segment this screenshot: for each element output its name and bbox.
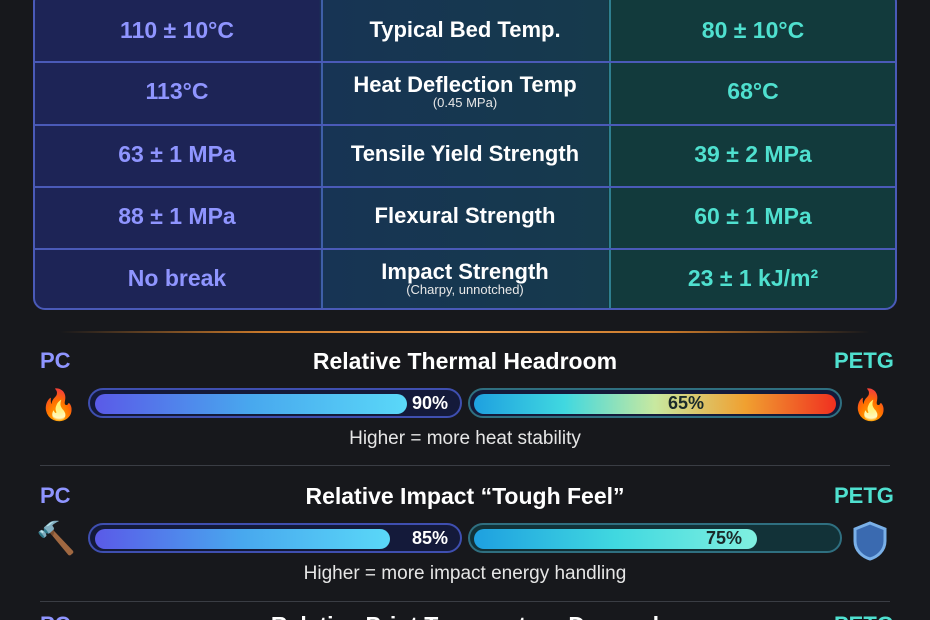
bar: PC 90% xyxy=(88,388,462,418)
icon: flame left: 🔥 xyxy=(40,389,77,422)
icon: shield xyxy=(854,521,886,560)
row: flexural: Flexural Strength xyxy=(375,203,555,228)
row: impact: Impact Strength xyxy=(381,259,549,284)
section: impact tough feel: PC xyxy=(40,483,71,508)
section: thermal headroom: PC xyxy=(40,348,71,373)
section: print temperature (cut off) xyxy=(40,612,894,620)
section: impact tough feel: PETG xyxy=(834,483,894,508)
section: thermal headroom: Relative Thermal Headroom xyxy=(313,348,617,374)
row: impact: No break xyxy=(128,265,226,291)
row: bed temp: 80 ± 10°C xyxy=(702,16,804,42)
icon: flame right: 🔥 xyxy=(852,389,889,422)
bar: PETG 65% xyxy=(468,388,842,418)
row: bed temp xyxy=(120,16,804,42)
row: heat deflection: 113°C xyxy=(146,78,208,104)
row: heat deflection: 68°C xyxy=(727,78,779,104)
row: tensile: Tensile Yield Strength xyxy=(351,141,579,166)
row: heat deflection: Heat Deflection Temp xyxy=(353,72,577,97)
section: thermal headroom: Higher = more heat stability xyxy=(349,428,581,449)
row: impact xyxy=(128,259,818,297)
section: impact tough feel: Relative Impact “Tough Feel” xyxy=(305,483,625,509)
section: impact tough feel: Higher = more impact energy handling xyxy=(304,563,626,584)
row: impact: (Charpy, unnotched) xyxy=(406,282,524,297)
row: flexural: 60 ± 1 MPa xyxy=(694,202,812,228)
section: thermal headroom: PETG xyxy=(834,348,894,373)
bar: PETG 75% xyxy=(468,523,842,553)
bar: PC 85% xyxy=(88,523,462,553)
row: tensile: 63 ± 1 MPa xyxy=(118,140,236,166)
row: heat deflection: (0.45 MPa) xyxy=(433,95,497,110)
row: flexural: 88 ± 1 MPa xyxy=(118,202,236,228)
icon: hammer: 🔨 xyxy=(36,520,76,556)
section: impact tough feel xyxy=(36,483,894,584)
row: flexural xyxy=(118,202,812,228)
row: bed temp: 110 ± 10°C xyxy=(120,16,234,42)
row: tensile xyxy=(118,140,812,166)
bar: PC 90%: 90% xyxy=(412,393,448,413)
bar: PETG 65%: 65% xyxy=(668,393,704,413)
row: tensile: 39 ± 2 MPa xyxy=(694,140,812,166)
row: impact: 23 ± 1 kJ/m² xyxy=(688,265,818,291)
bar: PC 85%: 85% xyxy=(412,528,448,548)
panel: comparison table xyxy=(33,0,897,310)
bar: PETG 75%: 75% xyxy=(706,528,742,548)
section: thermal headroom xyxy=(40,348,894,449)
row: heat deflection xyxy=(146,72,779,110)
row: bed temp: Typical Bed Temp. xyxy=(369,17,561,42)
